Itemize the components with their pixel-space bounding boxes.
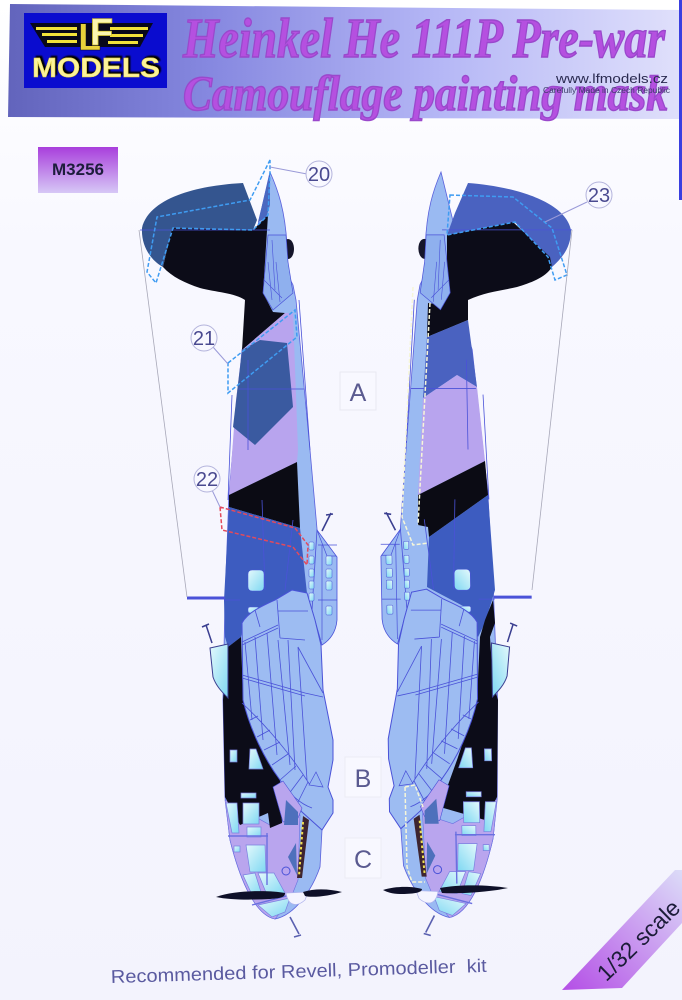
mask 23 <box>447 195 567 280</box>
callout 22: 22 <box>196 469 218 491</box>
left aircraft masks <box>147 160 308 565</box>
side gun blister <box>210 644 228 698</box>
left propellers <box>216 889 342 900</box>
tailplane stub <box>187 596 225 600</box>
logo: LF Models: MODELS <box>32 52 160 83</box>
label A: A <box>350 379 367 407</box>
gondola gun <box>322 513 333 531</box>
tail detail lines <box>140 230 310 600</box>
wires to tailplanes <box>139 230 572 597</box>
nose cone <box>286 892 308 904</box>
nose purple <box>225 800 300 919</box>
mask 20 <box>147 160 270 283</box>
callout 23 <box>545 182 612 222</box>
scale ribbon <box>562 870 682 990</box>
label B <box>345 757 381 797</box>
engine nacelle fin <box>309 772 323 787</box>
rudder <box>263 235 293 310</box>
origin note: Carefully Made in Czech Republic <box>543 86 670 95</box>
fuselage base <box>223 172 322 919</box>
right camouflage <box>418 183 571 820</box>
left aircraft <box>140 172 342 937</box>
label B: B <box>355 765 371 793</box>
label A <box>340 372 376 410</box>
callout 21 <box>191 325 228 364</box>
spinner disc behind fin <box>282 239 294 259</box>
nacelle panel <box>288 843 297 875</box>
right aircraft <box>375 172 585 935</box>
gondola <box>312 530 337 645</box>
wing and nacelle <box>242 590 333 830</box>
label C: C <box>354 846 372 874</box>
left camouflage <box>142 172 308 828</box>
logo: LF Models: F <box>90 12 113 54</box>
logo: LF Models: L <box>78 17 101 59</box>
right propellers <box>383 885 508 894</box>
callout 23: 23 <box>588 185 610 207</box>
website: www.lfmodels.cz <box>555 71 668 86</box>
logo: LF Models <box>24 12 167 88</box>
label C <box>345 838 381 878</box>
right details <box>375 230 585 935</box>
nose glazing <box>226 749 290 917</box>
product code box: M3256 <box>52 160 104 179</box>
callout 20: 20 <box>308 164 330 186</box>
white fuselage mask <box>402 287 430 882</box>
recommendation note: Recommended for Revell, Promodeller kit <box>110 955 487 987</box>
callout 20 <box>270 161 332 187</box>
wing panel lines <box>242 600 323 808</box>
engine purple band <box>273 781 302 822</box>
wing trailing ribs <box>250 716 308 806</box>
right fuselage base <box>389 172 501 918</box>
exhaust <box>297 816 309 878</box>
nose gun <box>290 917 301 937</box>
fuselage windows <box>248 542 332 615</box>
callout 22 <box>194 466 220 507</box>
callout 21: 21 <box>193 328 215 350</box>
right masks <box>402 195 567 882</box>
header banner <box>8 0 682 200</box>
mask 22 <box>220 507 308 565</box>
mask 21 <box>228 310 297 393</box>
product code box <box>38 147 118 193</box>
